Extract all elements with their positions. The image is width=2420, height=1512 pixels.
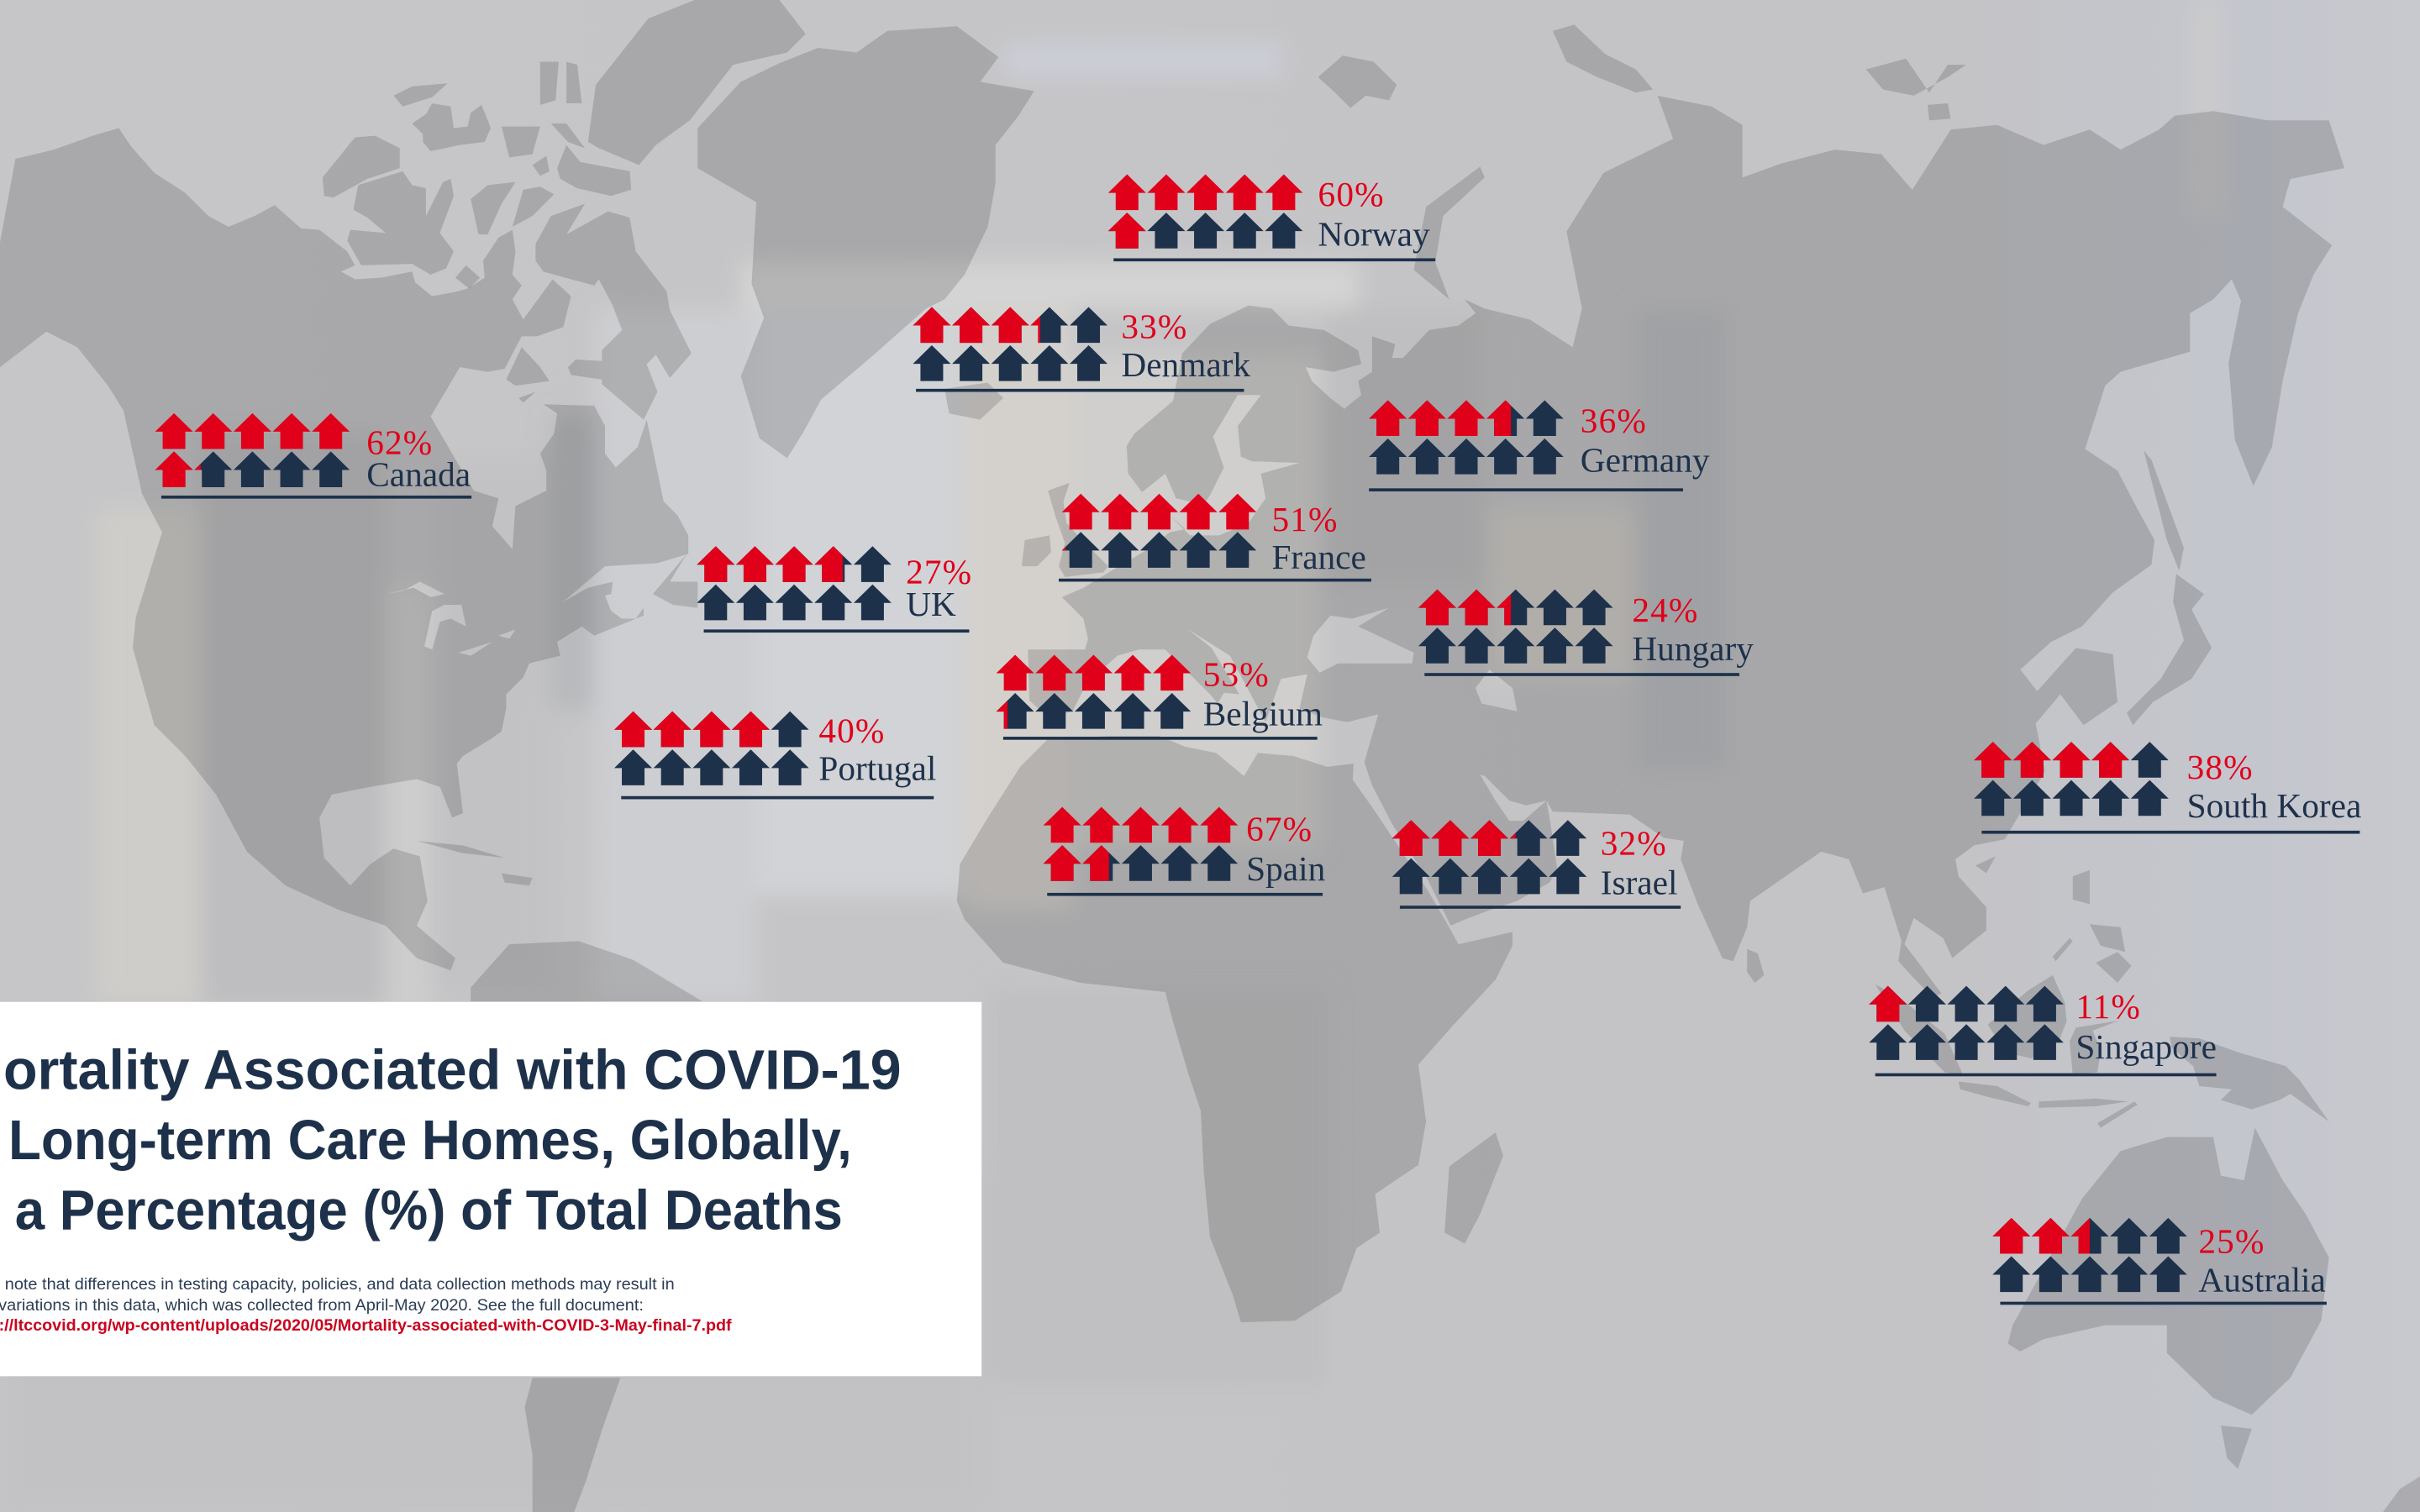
country: France 51% [1059,494,1371,581]
house icons: 3.8 of 10 red [1974,742,2169,816]
country name: Denmark [1121,345,1250,384]
percentage: 27% [906,552,972,591]
country: Norway 60% [1108,175,1435,261]
country: Belgium 53% [997,655,1323,740]
Caribbean islands [417,841,533,885]
house icons: red portion [697,546,892,620]
percentage: 60% [1318,175,1385,213]
Iceland [944,383,1003,420]
house icons: 2.4 of 10 red [1418,590,1613,664]
house icons: 2.5 of 10 red [1992,1218,2187,1292]
country name: South Korea [2187,786,2361,825]
title [0,1039,902,1242]
country name: Belgium [1203,694,1323,732]
country name: Singapore [2075,1027,2217,1066]
country: Canada 62% [155,413,471,499]
house icons: 6.2 of 10 red [155,413,350,487]
Newfoundland [653,554,697,608]
source note [0,1276,732,1335]
house icons: 3.3 of 10 red [913,307,1107,381]
house icons: 4 of 10 red [614,711,809,785]
house icons: 5.1 of 10 red [1062,494,1256,568]
New Guinea [2170,1037,2329,1121]
Eurasia [1028,96,2344,997]
Central and northern South America [471,941,702,1001]
percentage: 32% [1601,824,1667,863]
country: Australia 25% [1992,1218,2327,1305]
British Isles [1022,483,1108,577]
percentage: 25% [2198,1221,2265,1260]
country: Israel 32% [1392,820,1681,909]
country name: Norway [1318,215,1430,254]
percentage: 53% [1203,655,1270,694]
percentage: 40% [818,711,885,749]
percentage: 36% [1581,401,1647,439]
house icons: 3.2 of 10 red [1392,820,1586,894]
country name: France [1271,538,1366,576]
percentage: 33% [1121,307,1187,345]
country name: Australia [2198,1260,2326,1299]
house icons: 6 of 10 red [1108,175,1302,249]
country name: Spain [1246,849,1326,888]
title panel [0,1002,981,1376]
Arctic Russia and Svalbard islands [1318,24,1966,299]
house icons: 1.1 of 10 red [1869,986,2064,1060]
country: Hungary 24% [1418,590,1754,676]
source note: variations in this data, which was collected from April-May 2020. See the full document: [0,1297,644,1315]
country: Germany 36% [1369,400,1710,491]
percentage: 38% [2187,748,2254,786]
North America [0,128,688,970]
percentage: 51% [1271,500,1339,538]
Tasmania and New Zealand [2221,1425,2420,1512]
Australia [2008,1128,2329,1415]
Arctic islands [323,0,806,420]
country: Denmark 33% [913,307,1250,392]
Southeast Asia islands [1876,856,2138,1128]
country name: Canada [366,455,471,494]
Madagascar and Sri Lanka [1444,949,1764,1243]
country: South Korea 38% [1974,742,2361,834]
percentage: 11% [2075,987,2141,1026]
country: Singapore 11% [1869,986,2217,1076]
country name: Portugal [818,749,936,788]
house icons: 3.6 of 10 red [1369,400,1564,475]
Greenland [697,26,1034,459]
country: UK 27% [697,546,972,633]
house icons: 6.7 of 10 red [1044,807,1238,881]
country name: UK [906,585,956,623]
percentage: 67% [1246,809,1313,848]
house icons: 5.3 of 10 red [997,655,1191,729]
percentage: 62% [366,423,433,462]
country name: Israel [1601,864,1677,902]
country: Portugal 40% [614,711,936,799]
country name: Hungary [1632,629,1754,668]
country name: Germany [1581,440,1710,479]
Japan and Sakhalin [2127,450,2212,725]
percentage: 24% [1632,591,1698,629]
country: Spain 67% [1044,807,1326,896]
Africa [957,736,1512,1322]
southern South America [524,1378,620,1512]
